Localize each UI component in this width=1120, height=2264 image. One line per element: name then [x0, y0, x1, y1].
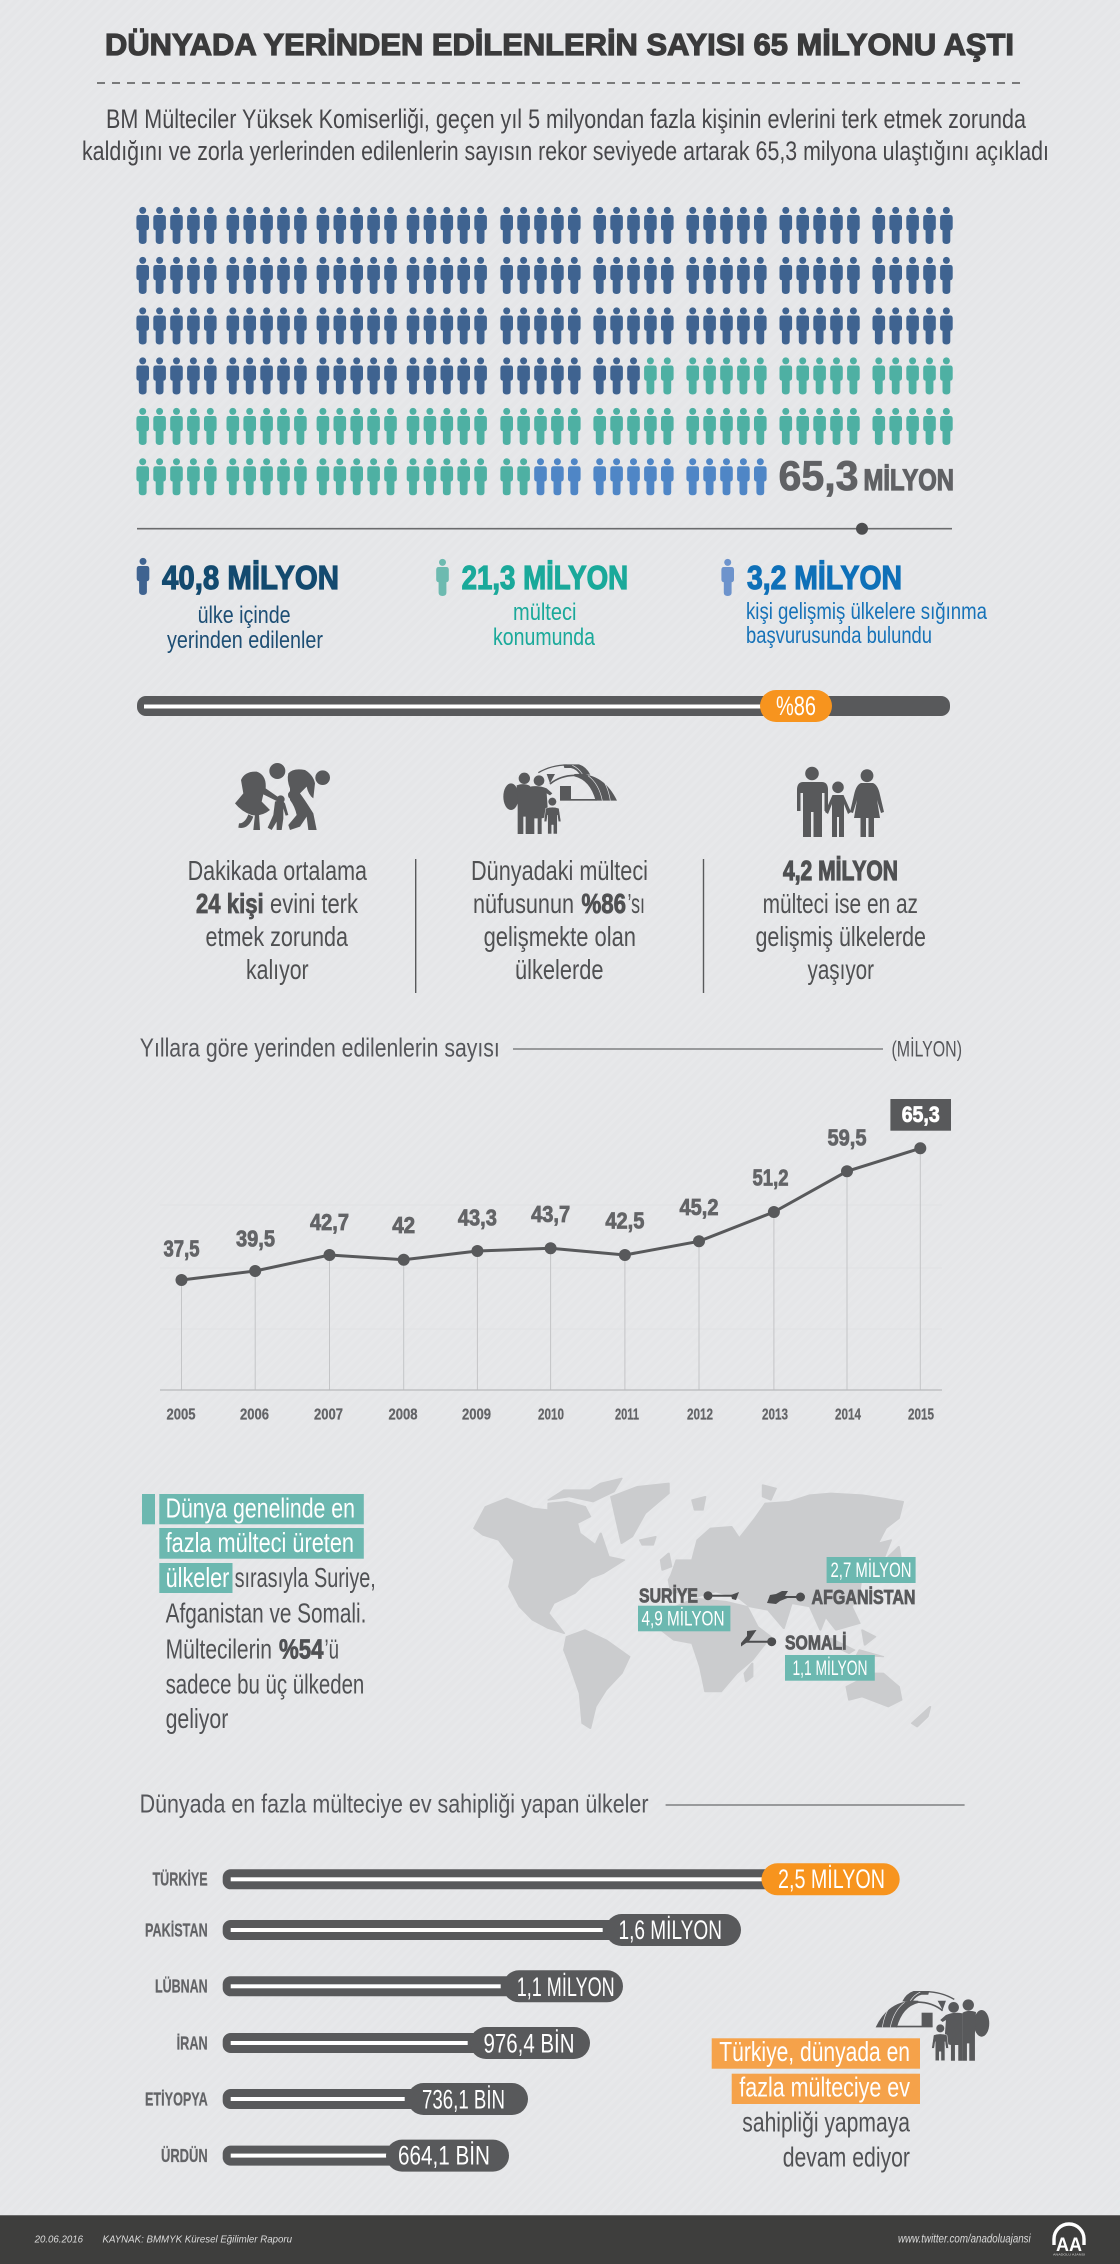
line chart: 2005 — [166, 1406, 196, 1423]
stat: 40,8 milyon: ülke içinde — [198, 602, 291, 629]
text block: yüzde 86: nüfusunun — [473, 888, 574, 919]
line chart: 45,2 — [680, 1194, 718, 1220]
callout: Türkiye — [712, 2036, 920, 2173]
text block: top refugee sources: ülkeler — [166, 1562, 229, 1593]
footer — [0, 2215, 1120, 2264]
text block: top refugee sources: ’ü — [324, 1633, 339, 1664]
bar: Türkiye: TÜRKİYE — [152, 1870, 208, 1890]
bar: Etiyopya: ETİYOPYA — [145, 2089, 208, 2109]
total 65,3 milyon: MİLYON — [864, 464, 954, 497]
pictogram: 65,3 million people — [136, 207, 953, 495]
total 65,3 milyon: 65,3 — [778, 452, 858, 499]
line chart — [160, 1099, 951, 1423]
stat: 40,8 milyon: yerinden edilenler — [167, 627, 323, 654]
line chart: 2011 — [615, 1406, 639, 1423]
bar: Etiyopya: 736,1 BİN — [422, 2084, 505, 2115]
progress bar 86% — [137, 690, 950, 722]
line chart: 42,7 — [310, 1209, 349, 1235]
bar: Pakistan: PAKİSTAN — [145, 1920, 208, 1940]
bar: Lübnan — [155, 1970, 623, 2002]
bar: Türkiye — [152, 1863, 900, 1895]
logo: Anadolu Ajansı — [1053, 2224, 1085, 2256]
stat: 40,8 milyon — [137, 558, 339, 654]
line chart: 2013 — [762, 1406, 788, 1423]
text block: 4,2 milyon: mülteci ise en az — [763, 888, 918, 919]
footer: 20.06.2016 — [34, 2234, 83, 2246]
line chart: 2012 — [687, 1406, 713, 1423]
heading: yearly chart: Yıllara göre yerinden edilenlerin sayısı — [140, 1033, 500, 1063]
line chart: 2007 — [314, 1406, 343, 1423]
bar: Lübnan: LÜBNAN — [155, 1977, 208, 1997]
map label: Somali: 1,1 MİLYON — [792, 1657, 868, 1680]
map label: Afganistan: AFGANİSTAN — [812, 1586, 916, 1609]
bar: Ürdün: ÜRDÜN — [161, 2146, 208, 2166]
bar: Etiyopya — [145, 2083, 528, 2115]
text block: yüzde 86: Dünyadaki mülteci — [471, 855, 648, 886]
progress bar 86%: %86 — [776, 691, 816, 721]
callout: Türkiye: sahipliği yapmaya — [742, 2107, 910, 2138]
map label: Somali — [741, 1630, 875, 1681]
text block: yüzde 86: ülkelerde — [515, 954, 604, 985]
line chart: 51,2 — [752, 1165, 788, 1191]
logo: Anadolu Ajansı: AA — [1056, 2235, 1082, 2256]
text block: top refugee sources: fazla mülteci üreten — [166, 1527, 354, 1558]
heading: yearly chart — [140, 1033, 962, 1063]
map label: Suriye — [638, 1585, 739, 1631]
line chart: 43,7 — [531, 1201, 570, 1227]
icon: tents and family, mirrored — [876, 1991, 989, 2061]
total 65,3 milyon — [778, 452, 954, 499]
bar: Ürdün — [161, 2140, 509, 2172]
text block: yüzde 86: %86 — [582, 888, 626, 919]
bar: Türkiye: 2,5 MİLYON — [778, 1863, 885, 1894]
bar: İran: 976,4 BİN — [484, 2028, 574, 2059]
line chart: 2009 — [462, 1406, 491, 1423]
logo: Anadolu Ajansı: ANADOLU AJANSI — [1053, 2252, 1085, 2256]
text block: 24 kişi: 24 kişi — [196, 888, 264, 919]
stat: 3,2 milyon: 3,2 MİLYON — [747, 559, 902, 596]
bar: İran: İRAN — [177, 2033, 208, 2053]
map label: Afganistan — [767, 1557, 916, 1609]
line chart: 43,3 — [458, 1205, 497, 1231]
line chart: 2015 — [908, 1406, 934, 1423]
line chart: 2014 — [835, 1406, 861, 1423]
text block: yüzde 86 — [471, 855, 648, 985]
bar: Pakistan — [145, 1914, 741, 1946]
line chart: 2008 — [388, 1406, 418, 1423]
bar: Lübnan: 1,1 MİLYON — [517, 1971, 615, 2002]
timeline marker — [137, 523, 952, 535]
icon: fleeing family — [235, 763, 330, 830]
text block: 4,2 milyon: gelişmiş ülkelerde — [756, 921, 926, 952]
line chart: 65,3 — [902, 1102, 940, 1127]
text block: top refugee sources: sadece bu üç ülkeden — [166, 1668, 364, 1699]
text block: top refugee sources: Mültecilerin — [166, 1633, 272, 1664]
footer: www.twitter.com/anadoluajansi — [898, 2234, 1031, 2246]
world map — [474, 1478, 930, 1728]
icon: family — [797, 767, 884, 837]
text block: top refugee sources: Dünya genelinde en — [166, 1492, 355, 1523]
text block: 4,2 milyon — [756, 855, 926, 985]
intro text — [82, 104, 1049, 166]
text block: yüzde 86: ’sı — [628, 888, 645, 919]
bar: Ürdün: 664,1 BİN — [398, 2140, 490, 2171]
stat: 3,2 milyon: başvurusunda bulundu — [746, 622, 932, 648]
line chart: 37,5 — [164, 1236, 200, 1262]
line chart: 2010 — [538, 1406, 564, 1423]
footer: KAYNAK: BMMYK Küresel Eğilimler Raporu — [102, 2234, 292, 2246]
title: DÜNYADA YERİNDEN EDİLENLERİN SAYISI 65 MİLYONU AŞTI — [105, 27, 1014, 62]
text block: top refugee sources: geliyor — [166, 1703, 228, 1734]
callout: Türkiye: fazla mülteciye ev — [739, 2072, 910, 2103]
stat: 40,8 milyon: 40,8 MİLYON — [162, 559, 339, 596]
bar: Pakistan: 1,6 MİLYON — [618, 1914, 722, 1945]
line chart: 39,5 — [236, 1226, 275, 1252]
heading: host countries: Dünyada en fazla mülteciye ev sahipliği yapan ülkeler — [140, 1789, 649, 1819]
line chart: 59,5 — [828, 1124, 867, 1150]
text block: top refugee sources: sırasıyla Suriye, — [235, 1562, 376, 1593]
map label: Afganistan: 2,7 MİLYON — [830, 1559, 912, 1582]
text block: top refugee sources: %54 — [279, 1633, 324, 1664]
text block: 24 kişi: Dakikada ortalama — [188, 855, 367, 886]
stat: 21,3 milyon: konumunda — [493, 624, 596, 651]
text block: top refugee sources: Afganistan ve Somali. — [166, 1598, 366, 1629]
heading: yearly chart: (MİLYON) — [892, 1037, 962, 1062]
text block: 24 kişi — [188, 855, 367, 985]
line chart: 42 — [392, 1212, 415, 1238]
stat: 21,3 milyon: 21,3 MİLYON — [462, 559, 628, 596]
map label: Suriye: 4,9 MİLYON — [642, 1608, 724, 1631]
map label: Suriye: SURİYE — [639, 1585, 698, 1608]
stat: 3,2 milyon — [721, 559, 987, 648]
text block: 4,2 milyon: yaşıyor — [808, 954, 874, 985]
line chart: 2006 — [240, 1406, 269, 1423]
callout: Türkiye: Türkiye, dünyada en — [719, 2036, 910, 2067]
text block: yüzde 86: gelişmekte olan — [484, 921, 636, 952]
text block: 4,2 milyon: 4,2 MİLYON — [783, 855, 898, 886]
stat: 3,2 milyon: kişi gelişmiş ülkelere sığınma — [746, 598, 987, 624]
text block: 24 kişi: kalıyor — [246, 954, 309, 985]
text block: top refugee sources — [142, 1492, 376, 1734]
icon: family and tents — [503, 764, 617, 834]
line chart: 42,5 — [605, 1208, 645, 1234]
text block: 24 kişi: etmek zorunda — [206, 921, 348, 952]
map label: Somali: SOMALİ — [785, 1631, 846, 1654]
text block: 24 kişi: evini terk — [270, 888, 359, 919]
bar: İran — [177, 2027, 590, 2059]
stat: 21,3 milyon: mülteci — [513, 599, 576, 626]
callout: Türkiye: devam ediyor — [783, 2142, 910, 2173]
stat: 21,3 milyon — [436, 559, 628, 651]
